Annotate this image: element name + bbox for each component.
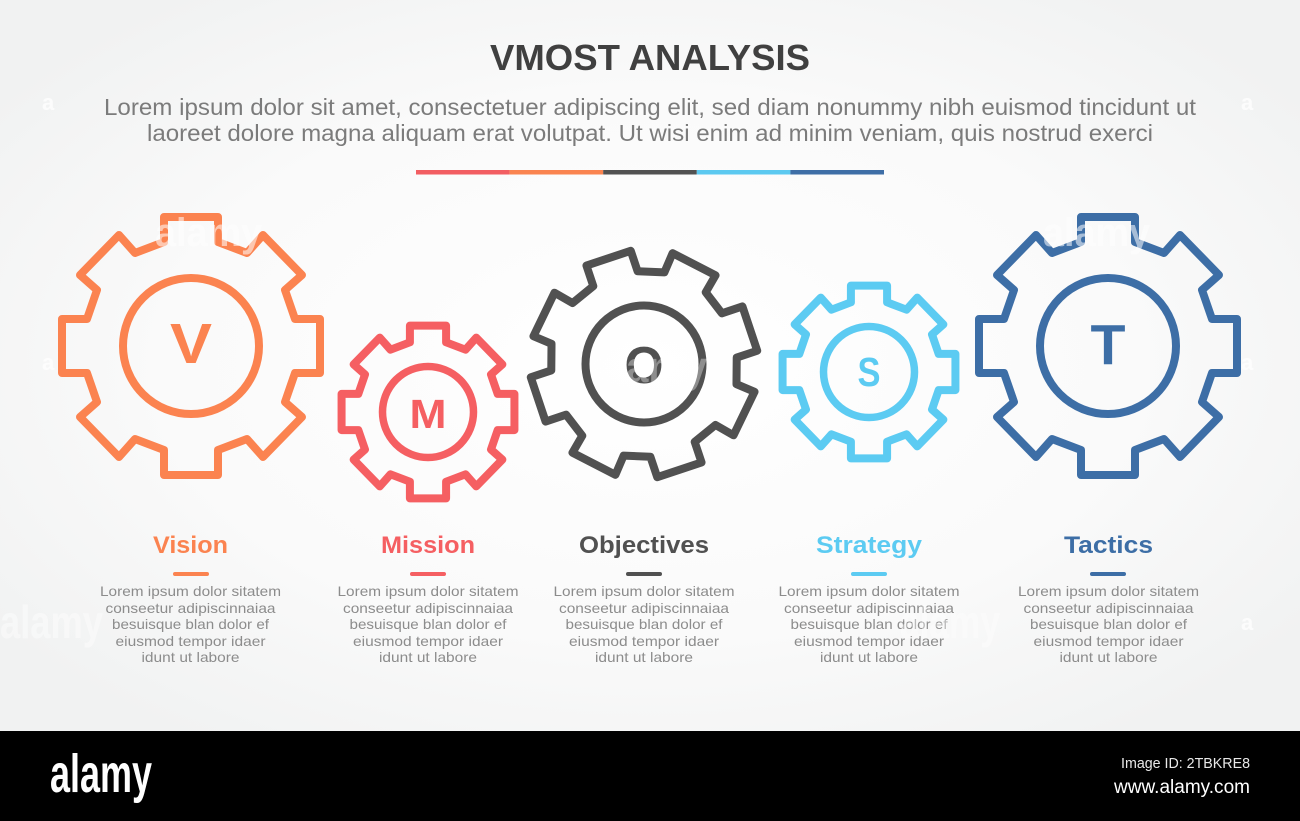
- intro text block: laoreet dolore magna aliquam erat volutpat. Ut wisi enim ad minim veniam, quis nostrud exerci: [147, 120, 1153, 146]
- column: Vision: conseetur adipiscinnaiaa: [106, 600, 276, 616]
- footer logo: alamy: [50, 744, 152, 804]
- column: Vision: eiusmod tempor idaer: [116, 633, 266, 649]
- column: Strategy: Strategy: [816, 532, 923, 559]
- column: Tactics: Lorem ipsum dolor sitatem: [1018, 583, 1199, 599]
- gear: Mission: [342, 326, 514, 498]
- gear: Strategy: S: [858, 349, 880, 395]
- watermarks: a: [1241, 350, 1254, 375]
- column: Objectives: besuisque blan dolor ef: [566, 616, 723, 632]
- column: Mission: conseetur adipiscinnaiaa: [343, 600, 513, 616]
- column: Objectives: eiusmod tempor idaer: [569, 633, 719, 649]
- column: Vision: Vision: [153, 532, 228, 559]
- column: Strategy: besuisque blan dolor ef: [790, 616, 948, 632]
- column: Vision: [100, 532, 281, 665]
- watermarks: [0, 90, 1254, 648]
- column: Objectives: [554, 532, 734, 665]
- column: Strategy: [778, 532, 960, 665]
- column: Tactics: Tactics: [1064, 532, 1153, 559]
- column: Strategy: eiusmod tempor idaer: [794, 633, 944, 649]
- title: VMOST ANALYSIS: [490, 37, 810, 78]
- gear: Objectives: [503, 223, 785, 505]
- watermarks: alamy: [900, 596, 1000, 648]
- footer bar: Image ID: 2TBKRE8: [1121, 755, 1250, 772]
- gear: Vision: V: [170, 312, 212, 376]
- footer bar: [0, 731, 1300, 821]
- column: Tactics: conseetur adipiscinnaiaa: [1024, 600, 1194, 616]
- gear: Tactics: [979, 217, 1237, 475]
- watermarks: a: [42, 90, 55, 115]
- column: Objectives: Lorem ipsum dolor sitatem: [554, 583, 734, 599]
- watermarks: alamy: [155, 211, 263, 255]
- column: Mission: eiusmod tempor idaer: [353, 633, 503, 649]
- column: Mission: idunt ut labore: [379, 649, 477, 665]
- watermarks: alamy: [1043, 211, 1151, 255]
- multicolour divider: [416, 170, 884, 174]
- column: Tactics: eiusmod tempor idaer: [1034, 633, 1184, 649]
- footer bar: www.alamy.com: [1113, 777, 1250, 798]
- column: Vision: Lorem ipsum dolor sitatem: [100, 583, 281, 599]
- intro text block: Lorem ipsum dolor sit amet, consectetuer adipiscing elit, sed diam nonummy nibh euismod tincidunt ut: [104, 94, 1197, 120]
- column: Vision: idunt ut labore: [142, 649, 240, 665]
- column: Objectives: Objectives: [579, 532, 709, 559]
- watermarks: alamy: [592, 343, 707, 392]
- watermarks: a: [1241, 610, 1254, 635]
- column: Objectives: conseetur adipiscinnaiaa: [559, 600, 729, 616]
- column: Mission: Mission: [381, 532, 475, 559]
- column: Mission: Lorem ipsum dolor sitatem: [338, 583, 518, 599]
- gear: Objectives: O: [624, 337, 664, 395]
- column: Tactics: besuisque blan dolor ef: [1030, 616, 1187, 632]
- watermarks: a: [42, 350, 55, 375]
- column: Tactics: [1018, 532, 1199, 665]
- watermarks: alamy: [0, 596, 103, 648]
- column: Mission: besuisque blan dolor ef: [350, 616, 507, 632]
- gear: Mission: M: [410, 391, 446, 437]
- gear: Tactics: T: [1090, 313, 1126, 377]
- column: Mission: [338, 532, 518, 665]
- gear: Strategy: [783, 286, 955, 458]
- intro text block: [104, 94, 1197, 146]
- column: Strategy: Lorem ipsum dolor sitatem: [778, 583, 960, 599]
- gear: Vision: [62, 217, 320, 475]
- column: Objectives: idunt ut labore: [595, 649, 693, 665]
- column: Vision: besuisque blan dolor ef: [112, 616, 269, 632]
- column: Tactics: idunt ut labore: [1060, 649, 1158, 665]
- column: Strategy: conseetur adipiscinnaiaa: [784, 600, 954, 616]
- column: Strategy: idunt ut labore: [820, 649, 918, 665]
- watermarks: a: [1241, 90, 1254, 115]
